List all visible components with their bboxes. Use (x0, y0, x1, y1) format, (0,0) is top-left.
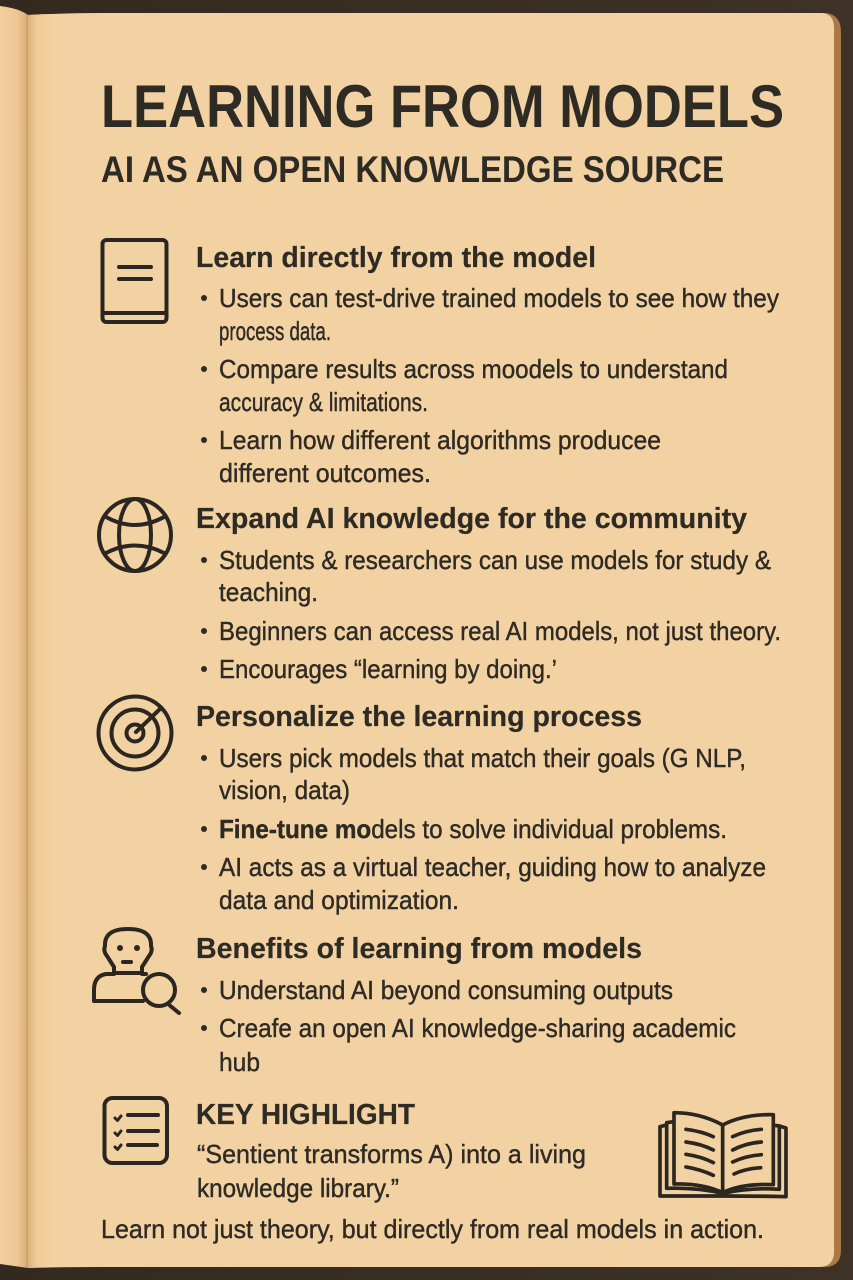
section: key highlight (104, 1098, 786, 1203)
bullet list: expand AI knowledge: teaching. (219, 577, 318, 607)
heading: key highlight: KEY HIGHLIGHT (196, 1099, 415, 1131)
section: learn directly from the model (102, 240, 779, 488)
left page strip (0, 6, 28, 1268)
bullet list: learn directly: accuracy & limitations. (219, 387, 428, 417)
heading: learn directly: Learn directly from the model (196, 242, 596, 274)
subtitle: AI AS AN OPEN KNOWLEDGE SOURCE (101, 149, 724, 190)
page gutter shading (28, 14, 56, 1268)
bullet list: expand AI knowledge: Encourages “learning by doing.’ (219, 654, 557, 684)
icon: globe (99, 499, 171, 571)
icon: checklist (104, 1098, 167, 1163)
bullet list: benefits: Understand AI beyond consuming outputs (219, 975, 673, 1005)
bullet list: expand AI knowledge (201, 545, 781, 684)
bullet list: expand AI knowledge: Students & researchers can use models for study & (219, 545, 771, 575)
bullet list: learn directly (201, 283, 779, 488)
heading: benefits: Benefits of learning from models (196, 933, 642, 965)
bullet list: learn directly: Compare results across moodels to understand (219, 354, 728, 384)
bullet list: learn directly: Users can test-drive trained models to see how they (219, 283, 779, 313)
bullet list: benefits (201, 975, 736, 1077)
bullet list: personalize: Users pick models that match their goals (G NLP, (219, 743, 746, 773)
icon: target (98, 696, 172, 770)
bullet list: learn directly: process data. (219, 316, 331, 346)
bullet list: benefits: Creafe an open AI knowledge-sharing academic (219, 1013, 736, 1043)
icon: open book (660, 1113, 786, 1197)
section: expand AI knowledge (99, 499, 781, 684)
icon: book (102, 240, 166, 322)
section: benefits (94, 929, 736, 1077)
bullet list: personalize: vision, data) (219, 775, 350, 805)
heading: personalize: Personalize the learning process (196, 701, 642, 733)
quote: “Sentient transforms A) into a living (197, 1139, 586, 1169)
bullet list: learn directly: Learn how different algorithms producee (219, 425, 661, 455)
bullet list: personalize: AI acts as a virtual teacher, guiding how to analyze (219, 852, 766, 882)
icon: person with magnifier (94, 929, 179, 1013)
bullet list: personalize: data and optimization. (219, 885, 459, 915)
bullet list: learn directly: different outcomes. (219, 458, 431, 488)
bullet list: personalize: Fine-tune models to solve individual problems. (219, 814, 727, 844)
quote (197, 1139, 586, 1203)
heading: expand AI knowledge: Expand AI knowledge for the community (196, 503, 747, 535)
bullet list: expand AI knowledge: Beginners can access real AI models, not just theory. (219, 616, 781, 646)
section: personalize (98, 696, 766, 915)
bullet list: personalize (201, 743, 766, 915)
bullet list: benefits: hub (219, 1047, 260, 1077)
right page edge (760, 13, 841, 1267)
footer line: Learn not just theory, but directly from real models in action. (101, 1214, 764, 1244)
quote: knowledge library.” (197, 1173, 399, 1203)
